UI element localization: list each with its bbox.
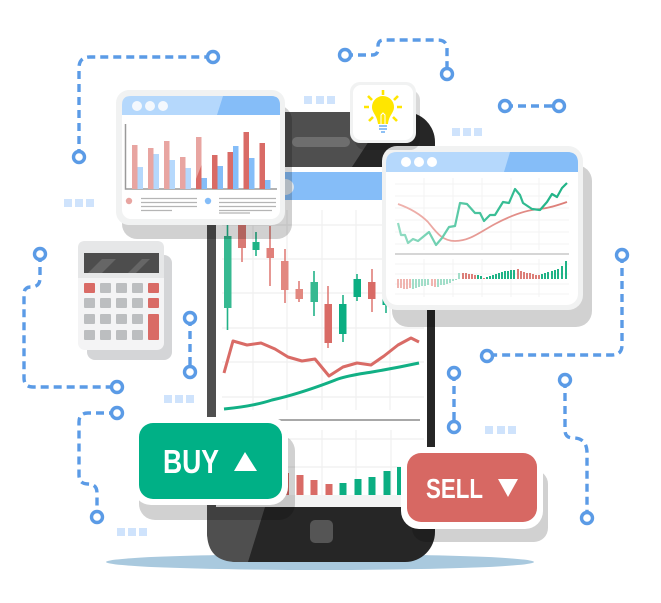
connector: left bbox=[24, 248, 122, 392]
connector: right bbox=[482, 250, 628, 362]
home button bbox=[310, 520, 333, 543]
bars bbox=[132, 132, 270, 189]
volume bars bbox=[285, 467, 404, 495]
phone bbox=[207, 112, 435, 562]
screen footer band bbox=[216, 495, 427, 507]
button: BUY bbox=[133, 417, 295, 520]
red line bbox=[224, 338, 419, 376]
panel: line chart window bbox=[382, 146, 592, 327]
down arrow bbox=[498, 479, 518, 497]
SELL label: SELL bbox=[426, 473, 483, 504]
red trend line bbox=[398, 202, 567, 241]
connector: top left bbox=[74, 52, 218, 162]
icon: calculator bbox=[78, 241, 172, 360]
divider bbox=[395, 253, 569, 255]
window header bbox=[386, 152, 578, 172]
green line bbox=[224, 363, 419, 409]
window shadow bbox=[122, 105, 292, 239]
connector: by calculator bbox=[184, 312, 196, 378]
window header bbox=[122, 96, 280, 115]
screen bbox=[216, 167, 427, 507]
panel: bar chart window bbox=[116, 90, 292, 239]
axes bbox=[126, 124, 277, 189]
screen header bbox=[216, 172, 427, 200]
connector: lower left bbox=[79, 408, 122, 522]
chart grid bbox=[395, 178, 569, 297]
oscillator bars bbox=[398, 261, 566, 289]
connector: top centre bbox=[340, 40, 452, 80]
connector: right of phone bbox=[448, 368, 460, 432]
decorative squares bbox=[64, 96, 516, 536]
bulb rays bbox=[364, 90, 402, 121]
connector: top right bbox=[500, 100, 564, 112]
button: SELL bbox=[401, 447, 548, 542]
legend bbox=[126, 198, 132, 204]
screen grid bbox=[222, 210, 424, 495]
candlesticks bbox=[224, 220, 390, 348]
icon: light bulb card bbox=[350, 82, 420, 150]
green price line bbox=[398, 183, 567, 245]
screen pill bbox=[276, 179, 294, 195]
bulb base bbox=[379, 126, 387, 132]
phone shine bbox=[207, 112, 388, 562]
legend text lines bbox=[141, 198, 197, 210]
ground shadow bbox=[106, 554, 534, 570]
BUY label: BUY bbox=[163, 443, 219, 480]
bulb bbox=[372, 96, 394, 124]
phone body bbox=[207, 112, 435, 562]
up arrow bbox=[234, 452, 257, 471]
window frame bbox=[382, 146, 583, 310]
divider bbox=[277, 419, 420, 421]
speaker bbox=[292, 137, 350, 147]
connector: lower right bbox=[560, 374, 592, 524]
window shadow bbox=[392, 165, 592, 327]
window frame bbox=[116, 90, 285, 225]
